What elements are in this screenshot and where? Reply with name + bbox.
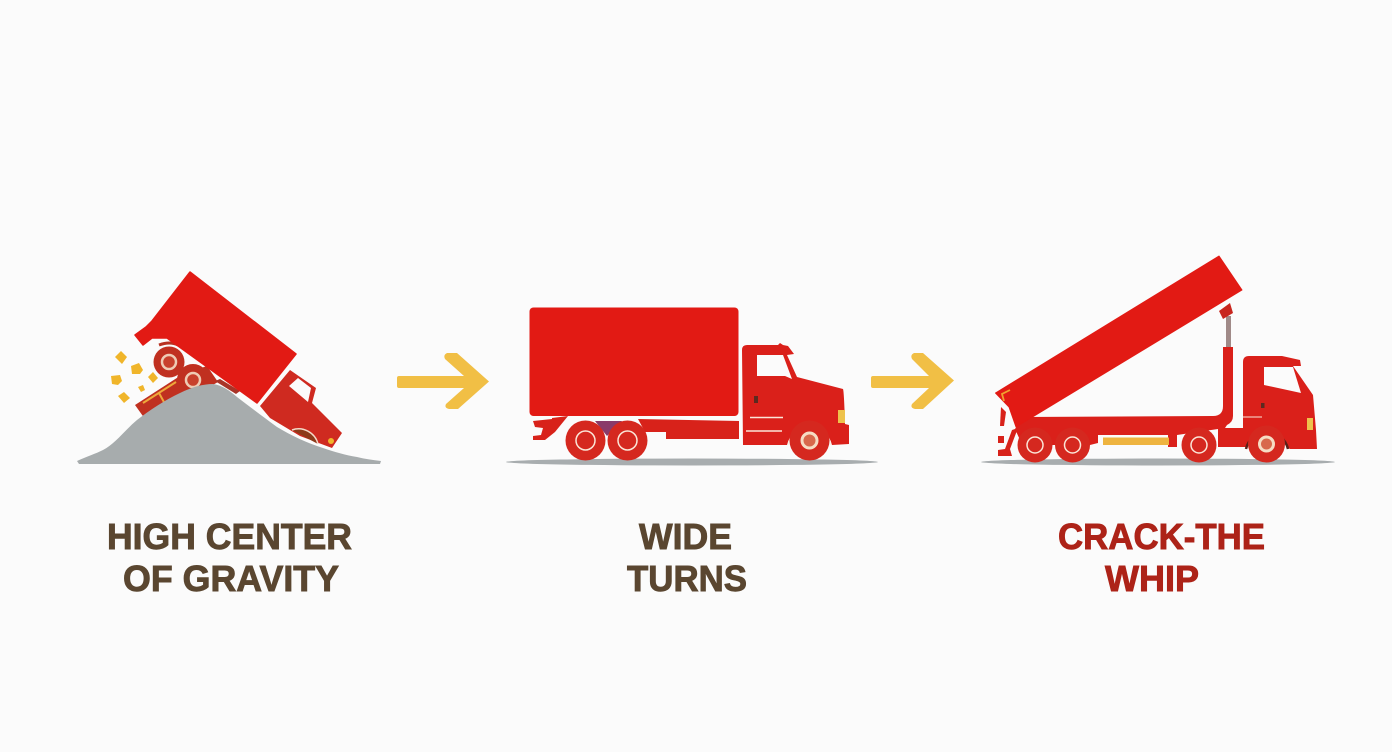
heading: high center of gravity: HIGH CENTER: [107, 516, 352, 557]
ground shadow: [506, 458, 878, 466]
heading: wide turns: [627, 516, 747, 599]
arrow: second yellow arrow: [871, 353, 954, 409]
icon: cargo box: [530, 308, 738, 416]
icon: chassis frame: [1015, 347, 1243, 447]
heading: crack-the-whip: [1058, 516, 1265, 599]
icon: rear bumper pieces: [998, 407, 1018, 456]
panel: wide turns illustration: [506, 308, 878, 466]
icon: truck cab: [742, 343, 849, 445]
icon: tipping cargo box: [135, 272, 296, 403]
icon: yellow debris: [111, 351, 176, 423]
panel: crack-the-whip illustration: [981, 256, 1335, 466]
heading: high center of gravity: [107, 516, 352, 599]
heading: crack-the-whip: WHIP: [1105, 558, 1199, 599]
icon: rear hitch and frame: [533, 416, 739, 440]
icon: bed corner chevron: [1002, 390, 1010, 401]
heading: wide turns: WIDE: [639, 516, 732, 557]
heading: high center of gravity: OF GRAVITY: [123, 558, 339, 599]
icon: tipping truck cab: [260, 370, 342, 448]
heading: wide turns: TURNS: [627, 558, 747, 599]
ground shadow: [981, 458, 1335, 466]
panel: high center of gravity illustration: [77, 272, 381, 464]
icon: tilted dump bed: [996, 256, 1242, 427]
heading: crack-the-whip: CRACK-THE: [1058, 516, 1265, 557]
icon: overturned truck chassis: [135, 343, 240, 419]
icon: yellow side rail: [1103, 438, 1169, 445]
icon: truck cab: [1243, 356, 1317, 449]
icon: hydraulic cylinder: [1219, 303, 1233, 347]
icon: truck wheels: [1018, 426, 1285, 462]
icon: truck wheels: [566, 420, 830, 460]
icon: gray gravel mound: [77, 384, 381, 464]
arrow: first yellow arrow: [397, 353, 489, 409]
